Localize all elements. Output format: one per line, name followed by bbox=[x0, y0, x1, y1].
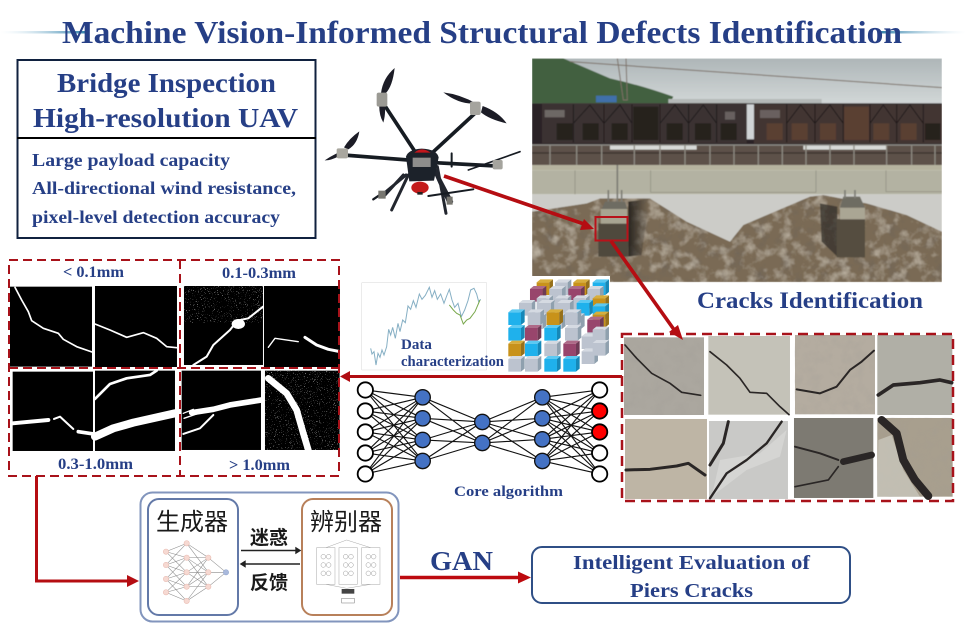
generator block bbox=[148, 499, 238, 615]
panel: binary crack maps by width bbox=[9, 260, 340, 476]
panel: intelligent evaluation bbox=[532, 547, 850, 603]
arrow: confuse bbox=[241, 548, 300, 553]
label: data characterization: Data bbox=[401, 337, 432, 353]
label: 0.1 to 0.3mm: 0.1-0.3mm bbox=[222, 265, 296, 282]
arrow: drone to pier bbox=[444, 176, 594, 230]
heading: bridge inspection: Bridge Inspection bbox=[57, 68, 276, 98]
feature list: pixel-level detection accuracy bbox=[32, 207, 280, 227]
title: Machine Vision-Informed Structural Defects Identification bbox=[62, 14, 902, 50]
bridge piers bbox=[598, 165, 865, 257]
generator block: 生成器 bbox=[156, 509, 228, 536]
arrow: binary maps to GAN bbox=[36, 476, 139, 587]
dashed outline bbox=[9, 260, 339, 476]
panel: crack photographs bbox=[622, 334, 953, 501]
label: over 1.0mm: > 1.0mm bbox=[229, 457, 290, 474]
label: GAN: GAN bbox=[430, 546, 494, 576]
title rule right bbox=[880, 31, 966, 34]
hill bbox=[532, 58, 673, 103]
arrow: crack photos to binary maps bbox=[340, 371, 622, 382]
discriminator block bbox=[302, 499, 392, 615]
panel: intelligent evaluation: Intelligent Evaluation of bbox=[573, 552, 810, 574]
panel: intelligent evaluation: Piers Cracks bbox=[630, 580, 753, 602]
panel: GAN generator and discriminator bbox=[140, 492, 398, 622]
discriminator block: 辨别器 bbox=[310, 509, 382, 536]
title rule left bbox=[0, 31, 86, 34]
photo: railway bridge and piers bbox=[532, 58, 942, 282]
label: under 0.1mm: < 0.1mm bbox=[63, 264, 124, 281]
water bbox=[532, 194, 942, 242]
white backing for size panel bbox=[8, 259, 342, 478]
highlight box on pier bbox=[596, 217, 628, 240]
label: core algorithm: Core algorithm bbox=[454, 484, 564, 500]
label: data characterization: characterization bbox=[401, 354, 505, 370]
dashed outline bbox=[622, 334, 953, 501]
icon: data cube bbox=[506, 276, 610, 375]
feature list: Large payload capacity bbox=[32, 150, 230, 170]
feature list: All-directional wind resistance, bbox=[32, 178, 296, 198]
chart: time series line bbox=[362, 283, 487, 370]
heading: cracks identification: Cracks Identification bbox=[697, 288, 923, 313]
label: confuse: 迷惑 bbox=[250, 527, 288, 549]
crack photo tiles bbox=[624, 335, 953, 499]
panel: bridge inspection UAV bbox=[17, 60, 316, 238]
train wagons bbox=[532, 103, 942, 145]
feature list bbox=[32, 150, 296, 227]
mud banks bbox=[532, 195, 942, 282]
binary crack tiles bbox=[10, 286, 340, 451]
arrow: GAN to evaluation bbox=[400, 572, 531, 584]
label: 0.3 to 1.0mm: 0.3-1.0mm bbox=[58, 456, 133, 473]
arrow: feedback bbox=[241, 562, 300, 566]
heading: high-resolution UAV: High-resolution UAV bbox=[33, 103, 299, 133]
bridge deck and railing bbox=[532, 144, 942, 194]
label: data characterization bbox=[401, 337, 505, 370]
icon: hexacopter drone bbox=[325, 68, 520, 213]
arrow: pier to crack photos bbox=[611, 241, 683, 340]
chart: autoencoder neural network bbox=[358, 382, 607, 482]
label: feedback: 反馈 bbox=[250, 572, 288, 594]
